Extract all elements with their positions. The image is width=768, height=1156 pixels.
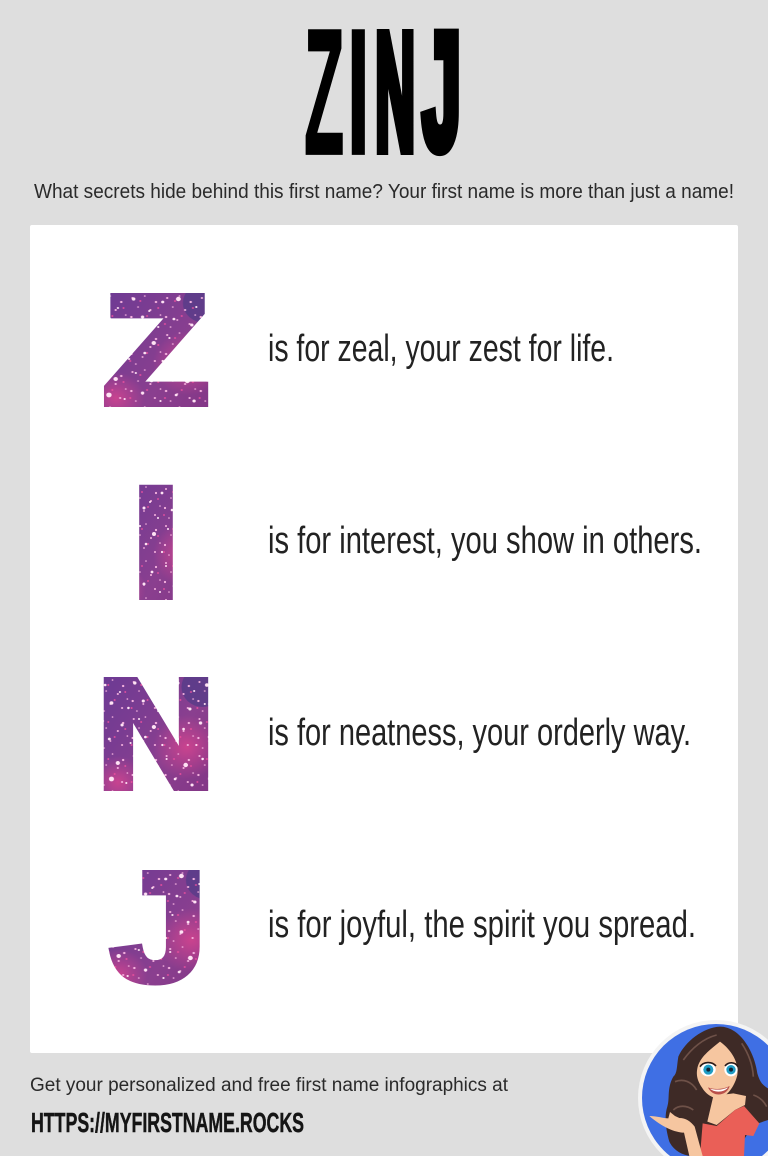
panel: white card — [30, 225, 738, 1053]
line: Z: is for zeal, your zest for life. — [268, 328, 614, 370]
neck — [707, 1093, 746, 1125]
title: ZINJ: J — [422, 0, 461, 183]
title: ZINJ: N — [375, 0, 415, 183]
icon: avatar — [638, 1020, 768, 1156]
footer url: HTTPS://MYFIRSTNAME.ROCKS — [31, 1107, 304, 1138]
letter row: J — [111, 841, 696, 1013]
subtitle: What secrets hide behind this first name? Your first name is more than just a name! — [34, 181, 734, 203]
letter row: Z — [103, 264, 614, 436]
galaxy letter Z: Z — [103, 264, 209, 436]
galaxy letter N: N — [97, 647, 215, 820]
face — [697, 1042, 738, 1098]
shirt — [700, 1106, 759, 1156]
footer text: Get your personalized and free first name infographics at — [30, 1075, 509, 1096]
title: ZINJ — [304, 0, 461, 193]
mouth — [708, 1086, 730, 1094]
galaxy letter I: I — [135, 458, 177, 626]
hair highlights — [673, 1035, 767, 1110]
galaxy letter J: J — [111, 841, 207, 1013]
letter row: N — [97, 647, 691, 820]
hair — [666, 1027, 768, 1156]
letter row: I — [135, 458, 702, 626]
eyes — [700, 1063, 716, 1076]
arm and hand — [649, 1112, 703, 1156]
